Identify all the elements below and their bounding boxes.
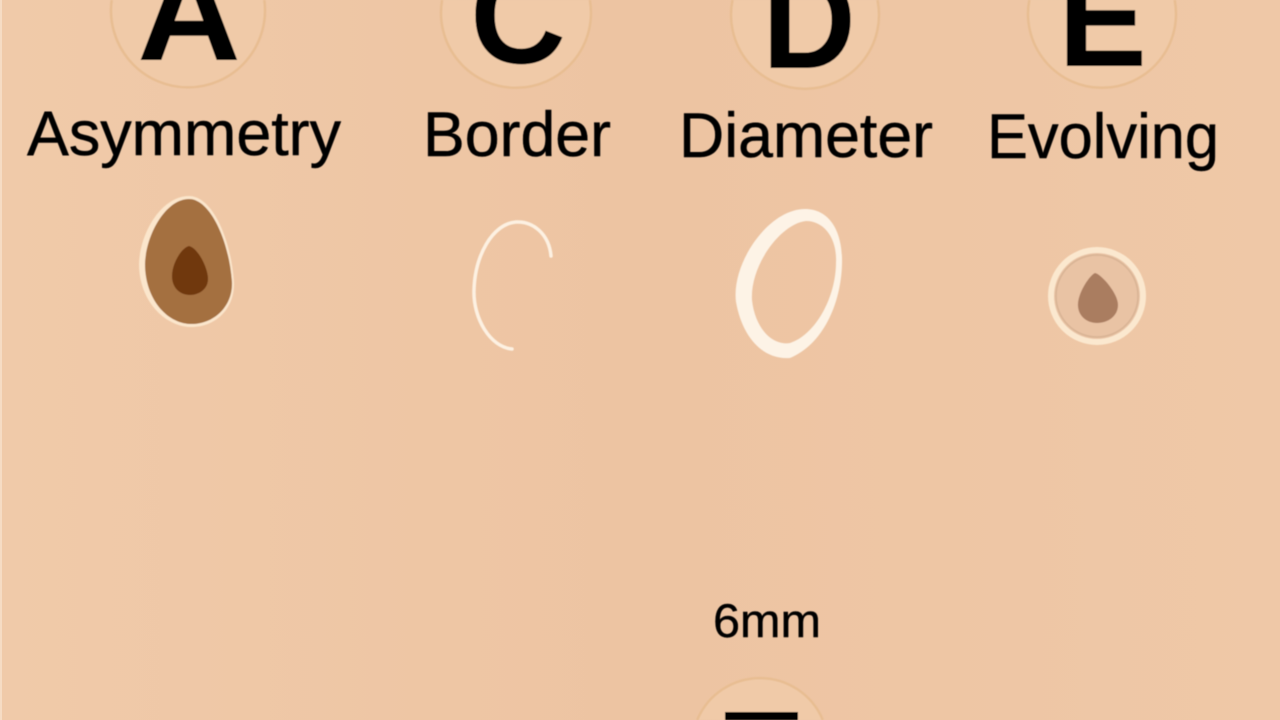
icon: irregular border outline xyxy=(474,222,551,349)
icon: diameter ring xyxy=(736,209,842,358)
badge: letter C xyxy=(441,0,591,93)
label: Border: Border xyxy=(423,100,611,170)
column: Asymmetry xyxy=(27,0,341,327)
icon: evolving mole xyxy=(1051,250,1143,342)
label: 6mm: 6mm xyxy=(713,594,821,647)
icon: asymmetric mole xyxy=(139,196,234,327)
column: Diameter xyxy=(679,0,933,358)
badge: letter A xyxy=(111,0,265,90)
column: Border xyxy=(423,0,611,349)
label: Diameter: Diameter xyxy=(679,101,933,171)
label: Asymmetry: Asymmetry xyxy=(27,99,341,169)
column: Evolving xyxy=(987,0,1219,342)
badge: letter D xyxy=(731,0,879,98)
badge: letter F partially cropped xyxy=(697,678,823,720)
badge: letter E xyxy=(1028,0,1176,96)
label: Evolving: Evolving xyxy=(987,102,1219,172)
